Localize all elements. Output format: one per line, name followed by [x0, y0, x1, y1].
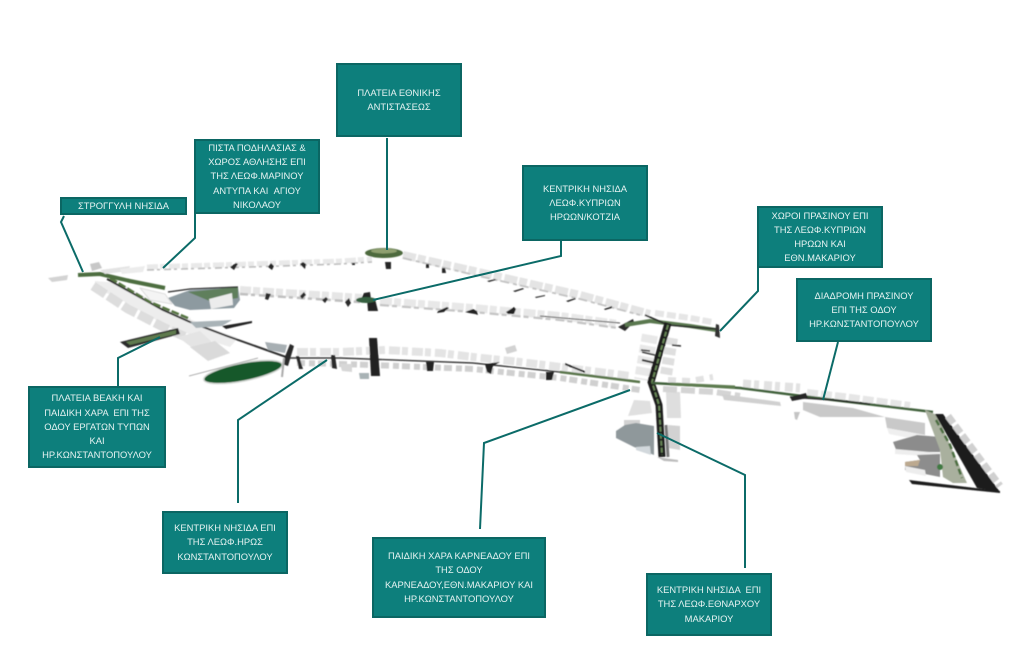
label: Karneadou playground: ΗΡ.ΚΩΝΣΤΑΝΤΟΠΟΥΛΟΥ: [404, 593, 514, 604]
eastern end block: [885, 410, 1000, 493]
square: Ethnikis Antistaseos: [365, 248, 403, 258]
leader: cycling track: [163, 213, 195, 268]
label: green spaces: ΗΡΩΩΝ ΚΑΙ: [794, 238, 846, 249]
label: green route: ΕΠΙ ΤΗΣ ΟΔΟΥ: [831, 304, 897, 315]
label: Plateia Ethnikis Antistaseos: [336, 63, 462, 137]
label: Karneadou playground: ΤΗΣ ΟΔΟΥ: [435, 564, 483, 575]
label: cycling track: ΝΙΚΟΛΑΟΥ: [233, 199, 281, 210]
label: central island Kyprion Iroon: ΛΕΩΦ.ΚΥΠΡΙΩΝ: [549, 197, 621, 208]
leader: Kyprion Iroon island: [373, 241, 561, 300]
sports facility grey plaza: [140, 287, 240, 310]
label: Veaki square and playground: ΗΡ.ΚΩΝΣΤΑΝΤΟΠΟΥΛΟΥ: [42, 449, 152, 460]
label: green spaces: ΕΘΝ.ΜΑΚΑΡΙΟΥ: [784, 252, 856, 263]
middle street: [240, 290, 620, 328]
label: green route: ΔΙΑΔΡΟΜΗ ΠΡΑΣΙΝΟΥ: [814, 290, 914, 301]
label: green route: [796, 278, 932, 342]
label: green route: ΗΡ.ΚΩΝΣΤΑΝΤΟΠΟΥΛΟΥ: [809, 318, 919, 329]
leader: round island: [61, 216, 83, 272]
label: Veaki square and playground: [28, 386, 166, 468]
label: cycling track: ΠΙΣΤΑ ΠΟΔΗΛΑΣΙΑΣ &: [208, 142, 306, 153]
label: central island Ethnarchou Makariou: ΤΗΣ ΛΕΩΦ.ΕΘΝΑΡΧΟΥ: [658, 598, 760, 609]
label: central island Iros Konstantopoulou: [162, 511, 288, 574]
right junction greenery: [618, 315, 720, 338]
leader: Karneadou playground: [480, 390, 630, 529]
grey building at vertical street: [616, 423, 654, 455]
label: cycling track: ΧΩΡΟΣ ΑΘΛΗΣΗΣ ΕΠΙ: [208, 156, 306, 167]
leader: Ethnikis Antistaseos square: [386, 138, 388, 250]
long street to the east: [652, 377, 933, 420]
label: central island Iros Konstantopoulou: ΚΩΝΣΤΑΝΤΟΠΟΥΛΟΥ: [177, 551, 273, 562]
label: central island Iros Konstantopoulou: ΚΕΝΤΡΙΚΗ ΝΗΣΙΔΑ ΕΠΙ: [174, 522, 276, 533]
label: cycling track: [194, 139, 320, 214]
label: central island Kyprion Iroon: [522, 165, 648, 241]
label: Veaki square and playground: ΚΑΙ: [89, 435, 105, 446]
label: Veaki square and playground: ΠΑΙΔΙΚΗ ΧΑΡΑ ΕΠΙ ΤΗΣ: [44, 407, 150, 418]
label: Veaki square and playground: ΟΔΟΥ ΕΡΓΑΤΩΝ ΤΥΠΩΝ: [44, 421, 150, 432]
label: central island Kyprion Iroon: ΗΡΩΩΝ/ΚΟΤΖΙΑ: [550, 211, 620, 222]
label: cycling track: ΑΝΤΥΠΑ ΚΑΙ ΑΓΙΟΥ: [213, 185, 301, 196]
label: green spaces: [757, 206, 883, 268]
leader: green spaces: [720, 268, 758, 331]
label: green spaces: ΤΗΣ ΛΕΩΦ.ΚΥΠΡΙΩΝ: [774, 224, 866, 235]
label: Karneadou playground: [372, 537, 546, 618]
Veaki square and playground: [120, 320, 294, 366]
label: cycling track: ΤΗΣ ΛΕΩΦ.ΜΑΡΙΝΟΥ: [211, 170, 303, 181]
lower street: [290, 338, 640, 390]
vertical street: [624, 323, 681, 462]
leader: green route: [823, 342, 838, 400]
top street: [147, 255, 712, 322]
label: Karneadou playground: ΚΑΡΝΕΑΔΟΥ,ΕΘΝ.ΜΑΚΑΡΙΟΥ ΚΑΙ: [385, 578, 533, 590]
left diagonal street: [48, 262, 286, 357]
label: Plateia Ethnikis Antistaseos: ΠΛΑΤΕΙΑ ΕΘΝΙΚΗΣ: [357, 87, 441, 98]
label: Plateia Ethnikis Antistaseos: ΑΝΤΙΣΤΑΣΕΩΣ: [367, 101, 431, 112]
leader: Iros island: [238, 360, 327, 503]
label: central island Kyprion Iroon: ΚΕΝΤΡΙΚΗ ΝΗΣΙΔΑ: [543, 183, 627, 194]
label: Veaki square and playground: ΠΛΑΤΕΙΑ ΒΕΑΚΗ ΚΑΙ: [51, 392, 142, 403]
leader lines: [61, 138, 838, 568]
label: green spaces: ΧΩΡΟΙ ΠΡΑΣΙΝΟΥ ΕΠΙ: [771, 210, 869, 221]
label: central island Iros Konstantopoulou: ΤΗΣ ΛΕΩΦ.ΗΡΩΣ: [187, 536, 263, 547]
label: central island Ethnarchou Makariou: ΜΑΚΑΡΙΟΥ: [685, 613, 733, 624]
leader: Ethnarchou island: [657, 433, 745, 568]
label: Karneadou playground: ΠΑΙΔΙΚΗ ΧΑΡΑ ΚΑΡΝΕΑΔΟΥ ΕΠΙ: [388, 550, 530, 561]
green sports track: [189, 356, 284, 388]
label: round island: ΣΤΡΟΓΓΥΛΗ ΝΗΣΙΔΑ: [78, 200, 169, 211]
leader: Veaki square: [118, 337, 160, 386]
label: central island Ethnarchou Makariou: [646, 573, 772, 636]
label: central island Ethnarchou Makariou: ΚΕΝΤΡΙΚΗ ΝΗΣΙΔΑ ΕΠΙ: [657, 584, 761, 595]
label: round island: [60, 197, 187, 215]
map model: streets and buildings: [48, 248, 1000, 493]
